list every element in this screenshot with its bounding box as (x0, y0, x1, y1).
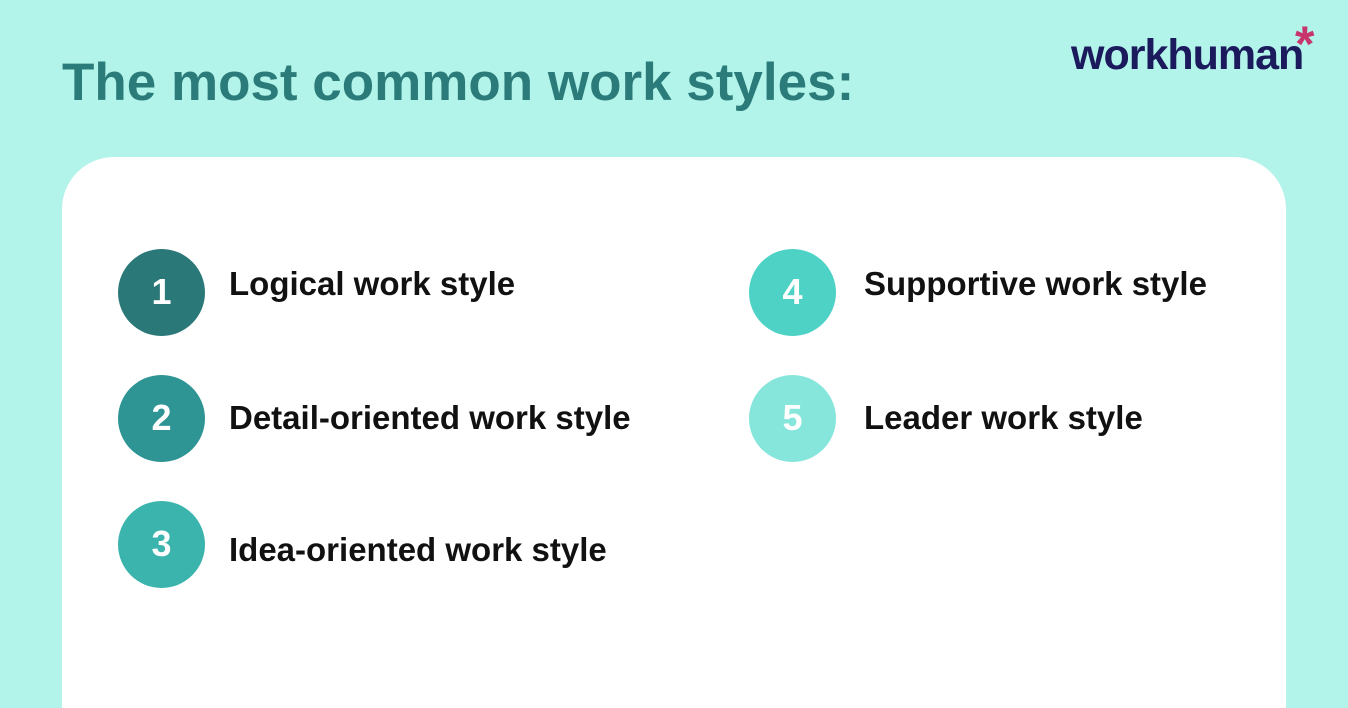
item 1 (118, 249, 515, 336)
logo: workhuman (1071, 31, 1303, 79)
title: The most common work styles: (62, 53, 854, 112)
item 4 (749, 249, 1207, 336)
item 2: 2 (151, 397, 172, 438)
item 3: 3 (151, 523, 172, 564)
item 5 (749, 375, 1143, 462)
item 3: Idea-oriented work style (229, 531, 607, 568)
item 4: Supportive work style (864, 265, 1207, 302)
item 2: Detail-oriented work style (229, 399, 631, 436)
item 1: 1 (151, 271, 172, 312)
text: * (1295, 16, 1313, 72)
item 5: Leader work style (864, 399, 1143, 436)
item 2 (118, 375, 631, 462)
item 5: 5 (782, 397, 803, 438)
panel: list (62, 157, 1286, 708)
item 4: 4 (782, 271, 803, 312)
item 1: Logical work style (229, 265, 515, 302)
item 3 (118, 501, 607, 588)
